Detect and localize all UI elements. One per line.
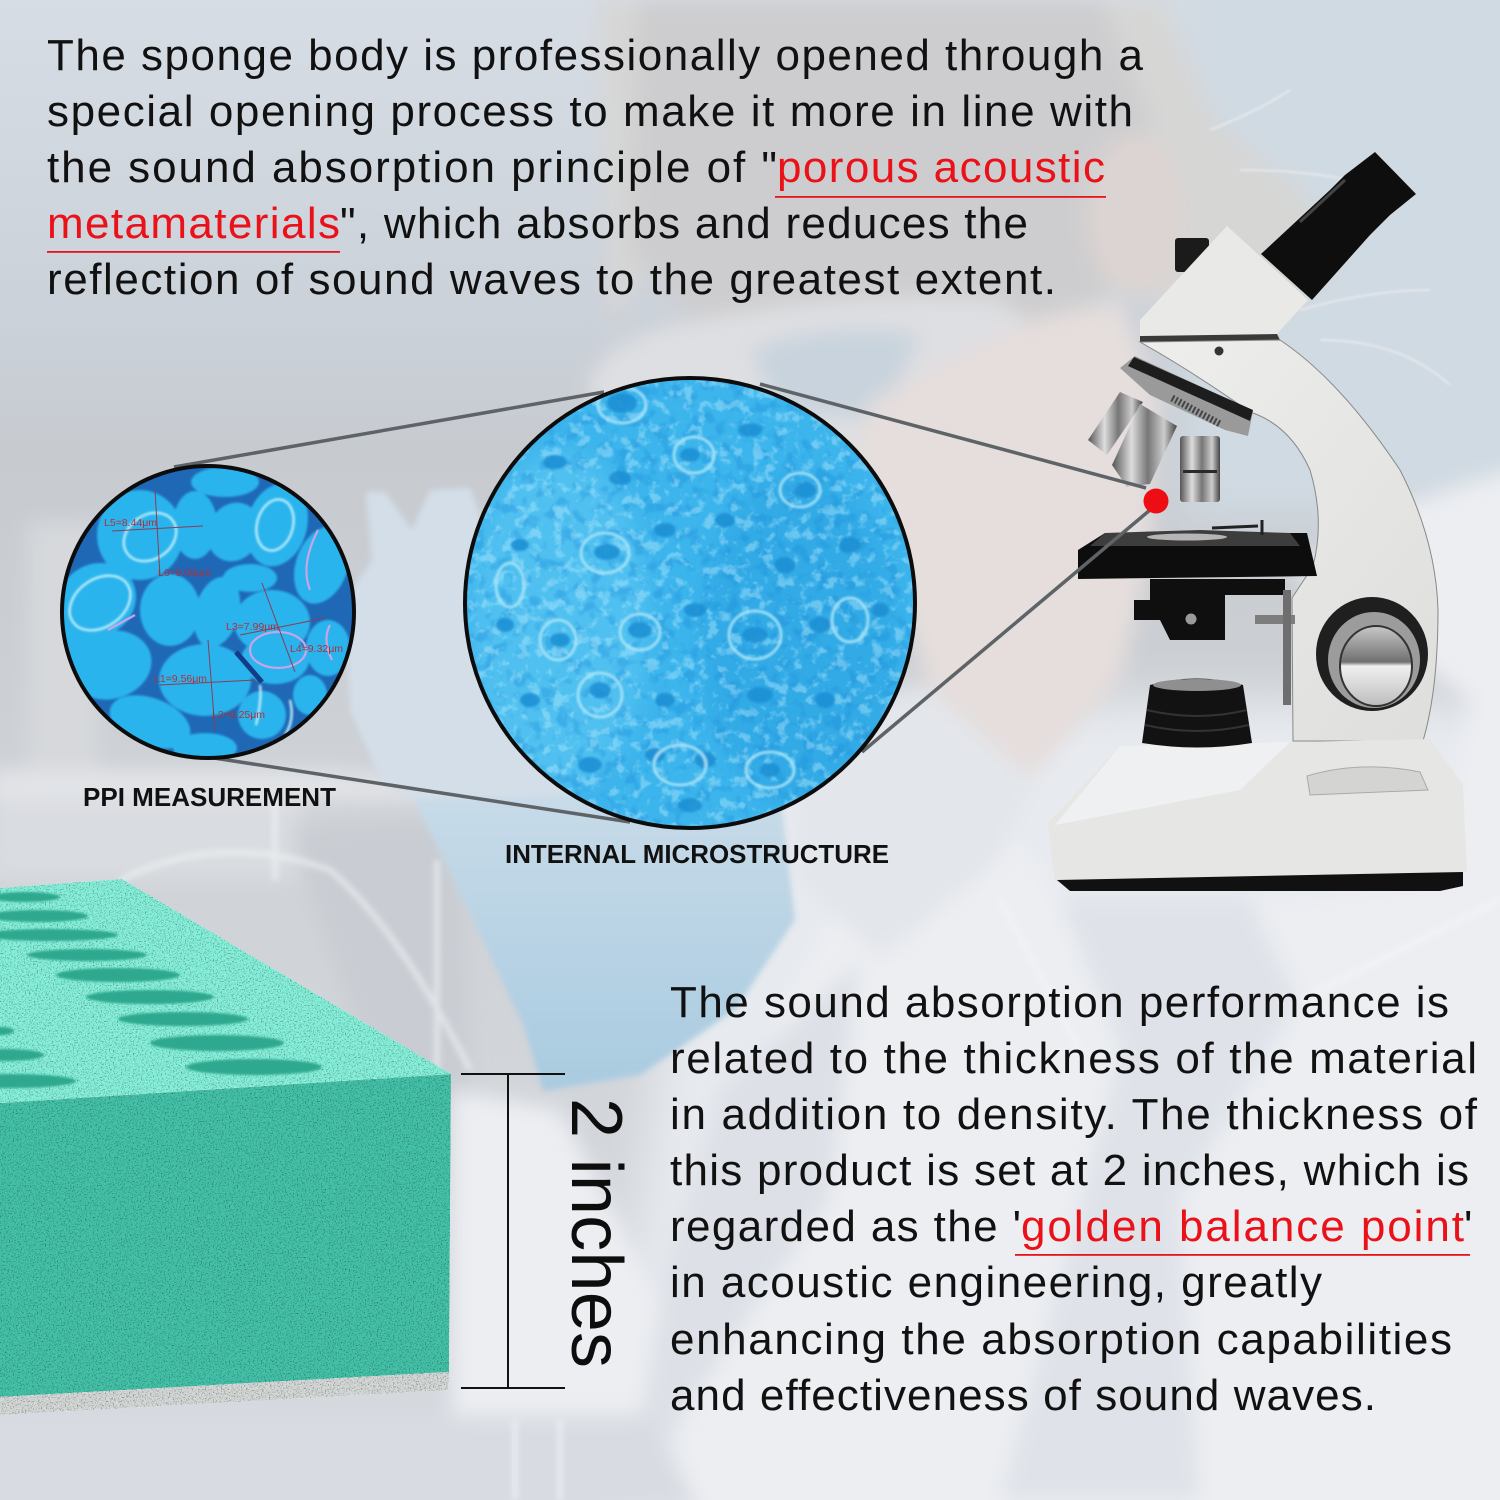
neck [850, 300, 1160, 780]
text block: thickness description: in addition to density. The thickness of [670, 1090, 1478, 1139]
measurement labels: L2=8.25μm [212, 709, 265, 721]
text block: sponge body description [47, 31, 1144, 304]
text block: thickness description: and effectiveness of sound waves. [670, 1371, 1376, 1420]
connector lines from the microscope to the magnified circles [174, 384, 1150, 822]
measurement labels: L1=9.56μm [154, 673, 207, 685]
objective turret [1120, 356, 1253, 436]
ear [1087, 133, 1183, 297]
measurement labels [104, 517, 343, 721]
measurement labels: L4=9.32μm [290, 643, 343, 655]
label: PPI measurement: PPI MEASUREMENT [83, 782, 336, 812]
text block: sponge body description: The sponge body is professionally opened through a [47, 31, 1144, 80]
lower white area beside sponge [452, 1090, 660, 1420]
hair and head [600, 0, 1345, 330]
sponge front face [0, 1074, 451, 1397]
text block: thickness description: regarded as the ' [670, 1202, 1021, 1251]
text block: sponge body description: the sound absorption principle of " [47, 143, 777, 192]
text block: thickness description: related to the thickness of the material [670, 1034, 1477, 1083]
stray hair strands [1210, 90, 1450, 385]
focus knob [1316, 597, 1428, 711]
goggles [590, 298, 1060, 470]
text block: thickness description: ' [1464, 1202, 1472, 1251]
coat [660, 460, 1500, 1500]
panel: internal microstructure circle [465, 378, 915, 828]
microscope rear port [1175, 238, 1209, 272]
thickness label: 2 inches [556, 1098, 636, 1368]
text block: sponge body description: porous acoustic [777, 143, 1105, 192]
measurement labels: L3=7.99μm [226, 621, 279, 633]
objective lenses [1088, 392, 1220, 502]
microscope [1048, 152, 1467, 891]
binocular head [1140, 226, 1308, 338]
text block: sponge body description: reflection of sound waves to the greatest extent. [47, 255, 1056, 304]
equipment on left [28, 522, 98, 777]
red focus dot [1144, 488, 1168, 514]
text block: thickness description: The sound absorption performance is [670, 978, 1449, 1027]
label: internal microstructure: INTERNAL MICROSTRUCTURE [505, 839, 889, 869]
eyepiece tube [1261, 152, 1416, 300]
fold highlights on the coat and glass [120, 800, 1500, 1500]
sponge top surface [0, 879, 451, 1103]
text block: thickness description: enhancing the absorption capabilities [670, 1315, 1452, 1364]
text block: thickness description [670, 978, 1478, 1420]
condenser lens [1142, 678, 1252, 748]
text block: sponge body description: special opening process to make it more in line with [47, 87, 1133, 136]
text block: sponge body description: ", which absorbs and reduces the [340, 199, 1028, 248]
text block: sponge body description: metamaterials [47, 199, 340, 248]
text block: thickness description: this product is set at 2 inches, which is [670, 1146, 1469, 1195]
text block: thickness description: golden balance point [1021, 1202, 1464, 1251]
gloved hand [345, 488, 760, 810]
base [1048, 739, 1467, 891]
measurement labels: L6=8.06μm [158, 567, 211, 579]
measurement labels: L5=8.44μm [104, 517, 157, 529]
sponge grey base layer [0, 1372, 449, 1415]
thickness dimension marker [461, 1074, 565, 1388]
curved arm [1140, 340, 1438, 741]
text block: thickness description: in acoustic engineering, greatly [670, 1258, 1322, 1307]
sleeve [414, 790, 795, 1091]
sponge holes [0, 892, 322, 1088]
sponge block [0, 879, 451, 1415]
panel: PPI measurement circle [44, 464, 360, 764]
stage [1078, 520, 1317, 705]
